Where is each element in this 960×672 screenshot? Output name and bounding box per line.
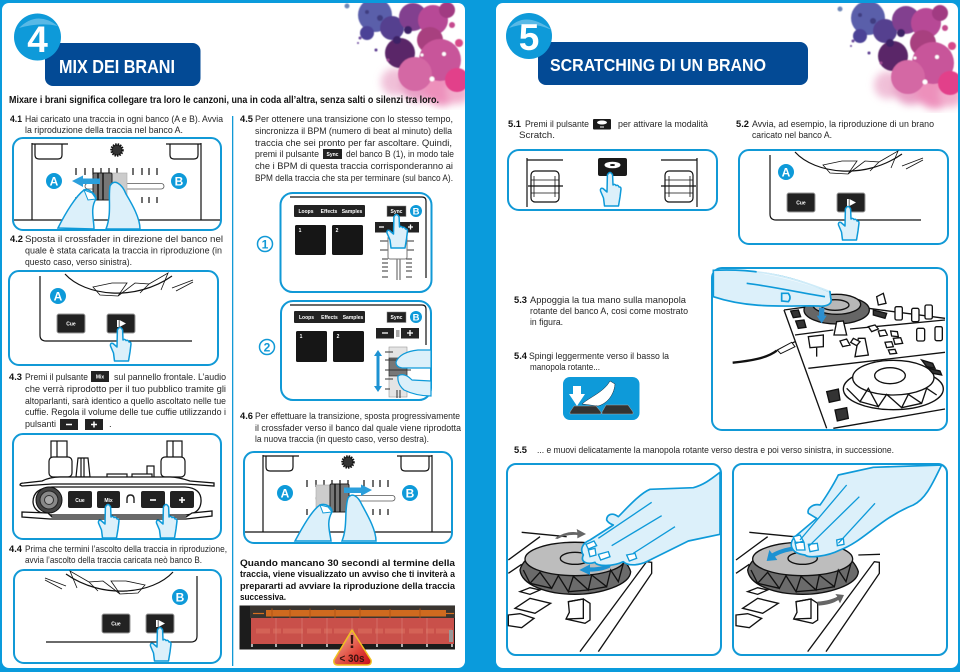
badge B — [410, 205, 422, 218]
panel: cue and play bank B — [14, 570, 221, 663]
left fader — [527, 158, 563, 207]
step 4.2 text: Sposta il crossfader in direzione del banco nel — [25, 234, 223, 245]
callout: 30 seconds warning text — [240, 558, 456, 603]
step 4.5 text: 4.5 — [240, 114, 254, 125]
panel: front panel buttons — [13, 434, 221, 539]
waveform display — [240, 606, 455, 650]
panel: crossfader moved to B: B — [406, 486, 415, 500]
pitch buttons — [375, 222, 419, 232]
cue button — [57, 314, 85, 333]
step 4.2 text — [10, 234, 223, 268]
badge: number 5 — [506, 13, 552, 59]
step 4.6 text — [240, 411, 462, 445]
cue button — [787, 193, 815, 212]
panel: cue and play bank B: B — [176, 590, 185, 604]
ghost fader — [316, 485, 331, 512]
knobs — [49, 441, 185, 478]
arrow grey — [555, 529, 586, 539]
two fingers — [396, 350, 431, 396]
step 4.3 text: 4.3 — [9, 372, 22, 383]
badge: number 4: 4 — [27, 19, 48, 60]
sync button: Sync — [391, 209, 403, 215]
step 4.3 text: Premi il pulsante — [25, 372, 88, 383]
heading: mix dei brani — [45, 43, 200, 86]
panel: sync press — [280, 193, 432, 292]
number 1 — [258, 236, 272, 252]
panel: crossfader moved to B — [244, 452, 452, 543]
pointing hand — [150, 628, 171, 661]
badge B: B — [413, 312, 420, 324]
icon: warning triangle: < 30s — [340, 653, 364, 665]
step 5.4 text: Spingi leggermente verso il basso la — [529, 351, 670, 362]
play button — [837, 193, 865, 212]
step 5.2 text: 5.2 — [736, 119, 749, 130]
fader and ticks — [380, 236, 414, 280]
step 4.3 text: altoparlanti, sarà identico a quello ascoltato nelle tue — [25, 396, 226, 407]
upper jog wheel — [804, 294, 869, 324]
panel: cue and play bank A — [9, 271, 218, 365]
pad mode bar — [294, 311, 365, 323]
cue, mix, minus, plus buttons: Mix — [104, 498, 113, 504]
panel: move jog wheel left — [733, 464, 947, 655]
step 4.5 text: premi il pulsante — [255, 149, 319, 160]
fader zone — [385, 347, 411, 398]
pointing hand — [387, 214, 408, 248]
pads: 1 — [300, 334, 303, 340]
step 4.3 text: pulsanti — [25, 419, 56, 430]
step 4.2 text: 4.2 — [10, 234, 23, 245]
crossfader knob — [330, 484, 349, 512]
panel: page 4 sheet — [2, 3, 465, 668]
cue, mix, minus, plus buttons: Cue — [75, 498, 85, 504]
step 4.6 text: Per effettuare la transizione, sposta progressivamente — [255, 411, 460, 422]
step 4.6 text: 4.6 — [240, 411, 253, 422]
step 4.2 text: questo caso, verso sinistra). — [25, 257, 132, 268]
double arrow — [374, 350, 382, 392]
sync button — [387, 312, 406, 322]
cue button: Cue — [66, 322, 76, 328]
pad mode bar: Effects — [321, 315, 338, 321]
play button — [107, 314, 135, 333]
panel: crossfader moved to A: B — [175, 174, 184, 188]
step 4.1 text: 4.1 — [10, 114, 23, 125]
step 4.5 text: Per ottenere una transizione con lo stesso tempo, — [255, 114, 453, 125]
step 5.5 text: 5.5 — [514, 445, 528, 456]
step 4.3 text: sul pannello frontale. L’audio — [114, 372, 226, 383]
number 1: 1 — [262, 238, 269, 252]
callout: 30 seconds warning text: traccia, viene visualizzato un avviso che ti inviterà a — [240, 569, 456, 580]
fingers on crossfader — [295, 495, 376, 541]
play button — [146, 614, 174, 633]
pointing hand — [110, 328, 131, 361]
pointing hands — [98, 504, 177, 538]
panel: cue and play — [739, 150, 948, 244]
blue arrow down — [817, 308, 827, 323]
step 4.3 text: cuffie. Regola il volume delle tue cuffie utilizzando i — [25, 407, 226, 418]
badge B: B — [413, 206, 420, 218]
step 5.1 text — [508, 119, 709, 141]
jog circle — [36, 487, 62, 513]
decoration: paint splatter page 4 — [344, 0, 470, 106]
icon: push down on jog wheel — [563, 377, 640, 420]
step 4.5 text — [240, 114, 454, 184]
step 4.2 text: quale è stata caricata la traccia in riproduzione (in — [25, 246, 222, 256]
hand — [582, 472, 720, 566]
heading: scratching di un brano: SCRATCHING DI UN BRANO — [550, 55, 766, 75]
step 4.3 text — [9, 371, 226, 430]
cue button: Cue — [111, 622, 121, 628]
crossfader knob — [93, 173, 112, 200]
step 5.3 text: rotante del banco A, cosi come mostrato — [530, 306, 688, 317]
pointing hand — [600, 172, 621, 206]
step 5.3 text: Appoggia la tua mano sulla manopola — [530, 295, 687, 306]
badge B — [410, 311, 422, 324]
step 4.5 text: del banco B (1), in modo tale — [346, 149, 454, 160]
sync button: Sync — [391, 315, 403, 321]
pads — [295, 225, 363, 255]
panel: move jog wheel right — [507, 464, 721, 655]
arrow blue — [579, 563, 612, 575]
step 5.4 text: 5.4 — [514, 351, 528, 362]
callout: 30 seconds warning text: prepararti ad avviare la riproduzione della traccia — [240, 581, 456, 592]
cue button: Cue — [796, 200, 806, 206]
step 5.4 text — [514, 351, 670, 373]
column divider — [232, 116, 233, 666]
step 4.5 text: traccia che sei pronto per far ascoltare. Quindi, — [255, 138, 452, 149]
ghost fader — [110, 173, 127, 199]
step 4.3 text: che verrà riprodotto per il tuo pubblico tramite gli — [25, 384, 226, 395]
step 5.1 text: per attivare la modalità — [618, 119, 709, 130]
step 4.3 text: . — [109, 419, 112, 430]
panel: crossfader moved to B: A — [281, 486, 290, 500]
decoration: paint splatter page 5 — [838, 1, 960, 109]
pads: 2 — [336, 228, 339, 234]
device body — [20, 477, 214, 519]
cable — [733, 342, 795, 363]
pad mode bar: Samples — [343, 315, 363, 321]
arrow right — [344, 484, 372, 496]
step 5.2 text: caricato nel banco A. — [752, 130, 832, 141]
step 5.1 text: Premi il pulsante — [525, 119, 589, 130]
fingers on crossfader — [58, 182, 140, 229]
step 5.3 text — [514, 295, 688, 328]
pointing hand — [838, 206, 859, 240]
step 4.1 text: Hai caricato una traccia in ogni banco (A e B). Avvia — [25, 114, 224, 125]
step 4.4 text — [9, 544, 227, 566]
scratch button icon — [598, 158, 627, 176]
hand — [713, 270, 831, 306]
intro text: Mixare i brani significa collegare tra loro le canzoni, una in coda all’altra, senza salti o silenzi tra loro. — [9, 95, 439, 106]
cue, mix, minus, plus buttons — [68, 491, 194, 508]
step 4.5 text: Sync — [327, 152, 339, 158]
step 5.3 text: 5.3 — [514, 295, 527, 306]
panel: controller with hand — [712, 268, 947, 430]
step 4.1 text: la riproduzione della traccia nel banco A. — [25, 125, 183, 136]
arrow left — [72, 176, 100, 187]
step 4.4 text: 4.4 — [9, 544, 23, 555]
pads: 1 — [299, 228, 302, 234]
badge: number 5: 5 — [519, 17, 539, 58]
number 2: 2 — [264, 340, 271, 354]
step 4.6 text: il crossfader verso il banco dal quale viene riprodotta — [255, 423, 462, 434]
pad mode bar — [294, 205, 365, 217]
pads: 2 — [337, 334, 340, 340]
pad mode bar: Samples — [342, 209, 362, 215]
buttons and knobs — [791, 293, 942, 421]
step 5.5 text: ... e muovi delicatamente la manopola rotante verso destra e poi verso sinistra, in successione. — [537, 445, 894, 456]
number 2 — [260, 340, 274, 354]
panel: crossfader moved to A: A — [50, 174, 59, 188]
step 4.5 text: sincronizza il BPM (numero di beat al minuto) della — [255, 126, 453, 137]
pad mode bar: Loops — [298, 209, 314, 215]
step 5.4 text: manopola rotante... — [530, 362, 600, 373]
step 5.3 text: in figura. — [530, 317, 563, 328]
pitch buttons — [376, 328, 419, 338]
controller body — [784, 307, 945, 428]
step 4.6 text: la nuova traccia (in questo caso, verso destra). — [255, 434, 429, 445]
panel: pitch fader — [281, 301, 431, 400]
step 5.1 text: Scratch. — [519, 130, 555, 141]
panel: cue and play bank A: A — [54, 290, 63, 304]
right fader — [661, 158, 697, 207]
sync button — [387, 206, 406, 216]
panel: scratch button — [508, 150, 717, 210]
pads — [296, 331, 364, 362]
panel: page 5 sheet — [496, 3, 958, 668]
icon: warning triangle: ! — [349, 632, 355, 652]
badge: number 4 — [14, 14, 61, 60]
step 5.2 text — [736, 119, 934, 141]
icon: headphones — [127, 495, 134, 503]
panel: crossfader moved to A — [13, 138, 221, 230]
step 5.2 text: Avvia, ad esempio, la riproduzione di un brano — [752, 119, 934, 130]
icon: warning triangle — [334, 630, 371, 665]
hand — [791, 465, 942, 557]
heading: scratching di un brano — [538, 42, 808, 85]
step 5.1 text: 5.1 — [508, 119, 522, 130]
heading: mix dei brani: MIX DEI BRANI — [59, 57, 175, 77]
lower jog wheel — [843, 360, 943, 410]
arrow grey — [817, 594, 844, 606]
callout: 30 seconds warning text: Quando mancano 30 secondi al termine della — [240, 558, 456, 569]
pad mode bar: Loops — [299, 315, 314, 321]
callout: 30 seconds warning text: successiva. — [240, 592, 286, 603]
step 4.1 text — [10, 114, 224, 136]
step 4.4 text: Prima che termini l’ascolto della traccia in riproduzione, — [25, 544, 227, 555]
panel: cue and play: A — [782, 166, 791, 180]
step 4.3 text: Mix — [96, 374, 104, 380]
step 4.5 text: che i BPM di questa traccia corrisponderanno ai — [255, 161, 453, 172]
step 4.4 text: avvia l’ascolto della traccia caricata neò banco B. — [25, 555, 202, 566]
pad mode bar: Effects — [321, 209, 338, 215]
arrow blue — [767, 547, 793, 561]
cue button — [102, 614, 130, 633]
step 4.5 text: BPM della traccia che sta per terminare (sul banco A). — [255, 173, 453, 184]
